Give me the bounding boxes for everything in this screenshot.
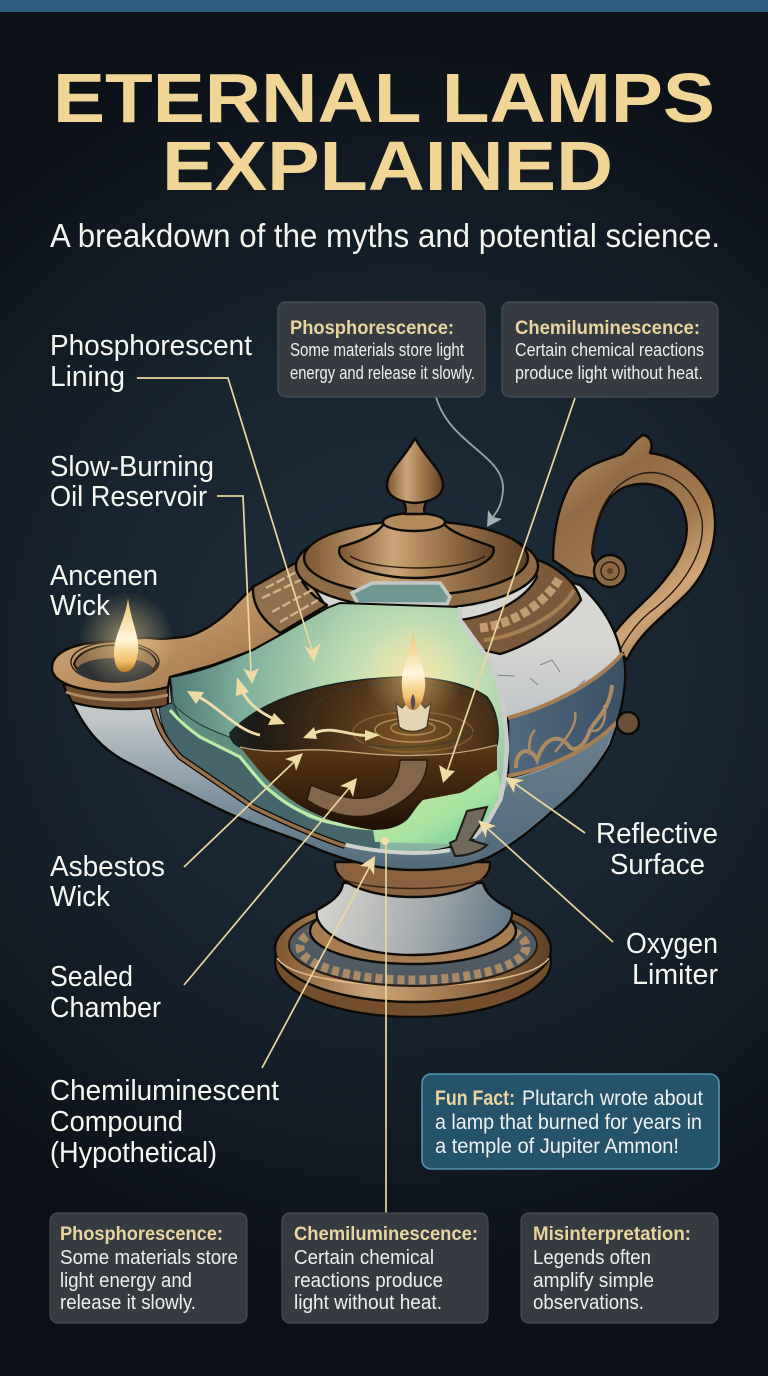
- label: slow-burning oil reservoir: Oil Reservoir: [50, 481, 207, 513]
- oxygen limiter valve: [450, 807, 487, 856]
- ornate right collar: [460, 557, 581, 654]
- oil body: [240, 745, 497, 830]
- label: chemiluminescent compound: (Hypothetical): [50, 1137, 217, 1169]
- label: asbestos wick: Wick: [50, 881, 110, 913]
- label: chemiluminescent compound: [50, 1075, 279, 1169]
- label: phosphorescent lining: [50, 330, 252, 393]
- central flame: [364, 622, 464, 722]
- silver shading on lower right: [480, 723, 617, 858]
- spout and wick ring: [52, 562, 327, 709]
- lamp body: [70, 560, 624, 870]
- ornate left collar: [253, 562, 327, 633]
- bottom shell highlight: [323, 838, 450, 853]
- oil surface: [230, 677, 498, 756]
- label: reflective surface: [596, 818, 718, 881]
- title: EXPLAINED: [162, 127, 613, 205]
- panel: bottom misinterpretation: observations.: [533, 1291, 644, 1314]
- label: ancenen wick: [50, 560, 158, 622]
- callout: fun fact: Plutarch wrote about: [522, 1087, 703, 1110]
- label: phosphorescent lining: Lining: [50, 361, 125, 393]
- callout: fun fact: [422, 1074, 719, 1169]
- label: reflective surface: Reflective: [596, 818, 718, 850]
- label: sealed chamber: [50, 961, 161, 1024]
- double-headed flow arrows: [187, 677, 380, 741]
- panel: bottom chemiluminescence: Chemiluminescence:: [294, 1223, 478, 1245]
- central wick: [396, 702, 431, 732]
- panel: top phosphorescence: energy and release it slowly.: [290, 362, 475, 383]
- panel: bottom phosphorescence: Some materials store: [60, 1246, 238, 1269]
- lamp foot: [275, 862, 551, 1017]
- label: sealed chamber: Sealed: [50, 961, 133, 993]
- panel: bottom misinterpretation: [521, 1213, 718, 1323]
- inner wall band: [172, 686, 380, 826]
- panel: top chemiluminescence: [502, 302, 718, 397]
- title: [53, 59, 715, 205]
- spout flame: [78, 592, 174, 688]
- oil front edge: [240, 745, 497, 756]
- title: ETERNAL LAMPS: [53, 59, 715, 137]
- illustration: oil lamp cutaway: [52, 435, 715, 1017]
- lower shell band: [160, 703, 380, 852]
- panel: bottom phosphorescence: Phosphorescence:: [60, 1223, 223, 1245]
- phosphorescent green line: [170, 710, 380, 829]
- panel: top phosphorescence: [278, 302, 485, 397]
- label: chemiluminescent compound: Chemiluminescent: [50, 1075, 279, 1107]
- lamp handle: [553, 435, 715, 660]
- panel: top phosphorescence: Some materials store light: [290, 339, 464, 360]
- label: slow-burning oil reservoir: [50, 451, 214, 513]
- leader lines and arrows: [137, 378, 613, 1213]
- label: asbestos wick: [50, 851, 165, 913]
- label: reflective surface: Surface: [610, 849, 705, 881]
- panel: bottom chemiluminescence: [282, 1213, 488, 1323]
- label: phosphorescent lining: Phosphorescent: [50, 330, 252, 362]
- panel: bottom phosphorescence: [50, 1213, 247, 1323]
- label: oxygen limiter: Limiter: [632, 959, 718, 991]
- panel: top chemiluminescence: produce light without heat.: [515, 362, 703, 383]
- decorated blue band: [508, 653, 639, 778]
- bright green phosphorescent pool: [373, 770, 501, 844]
- panel: bottom misinterpretation: Legends often: [533, 1246, 651, 1269]
- panel: bottom chemiluminescence: reactions produce: [294, 1269, 443, 1292]
- panel: bottom misinterpretation: amplify simple: [533, 1269, 654, 1292]
- panel: bottom misinterpretation: Misinterpretation:: [533, 1223, 691, 1245]
- bronze trim: [153, 708, 345, 846]
- subtitle: A breakdown of the myths and potential science.: [50, 217, 720, 254]
- reflective inner wall: [460, 607, 507, 838]
- panel: bottom chemiluminescence: Certain chemical: [294, 1246, 434, 1269]
- panel: top chemiluminescence: Chemiluminescence:: [515, 317, 700, 339]
- cracks on silver: [490, 660, 585, 690]
- label: ancenen wick: Wick: [50, 590, 110, 622]
- lamp lid: [296, 438, 538, 609]
- panel: top chemiluminescence: Certain chemical reactions: [515, 339, 704, 360]
- label: sealed chamber: Chamber: [50, 992, 161, 1024]
- submerged asbestos wick: [307, 760, 427, 817]
- label: ancenen wick: Ancenen: [50, 560, 158, 592]
- label: oxygen limiter: Oxygen: [626, 928, 718, 960]
- label: oxygen limiter: [626, 928, 718, 991]
- cutaway chamber glass: [160, 603, 507, 853]
- callout: fun fact: Fun Fact:: [435, 1087, 515, 1110]
- callout: fun fact: a temple of Jupiter Ammon!: [435, 1135, 679, 1158]
- label: asbestos wick: Asbestos: [50, 851, 165, 883]
- label: slow-burning oil reservoir: Slow-Burning: [50, 451, 214, 483]
- callout: fun fact: a lamp that burned for years in: [435, 1111, 702, 1134]
- panel: bottom phosphorescence: release it slowly.: [60, 1291, 196, 1314]
- panel: bottom phosphorescence: light energy and: [60, 1269, 192, 1292]
- panel: bottom chemiluminescence: light without heat.: [294, 1291, 442, 1314]
- panel: top phosphorescence: Phosphorescence:: [290, 317, 454, 339]
- label: chemiluminescent compound: Compound: [50, 1106, 183, 1138]
- oil ripples: [310, 683, 490, 752]
- bronze trim inner: [153, 708, 345, 846]
